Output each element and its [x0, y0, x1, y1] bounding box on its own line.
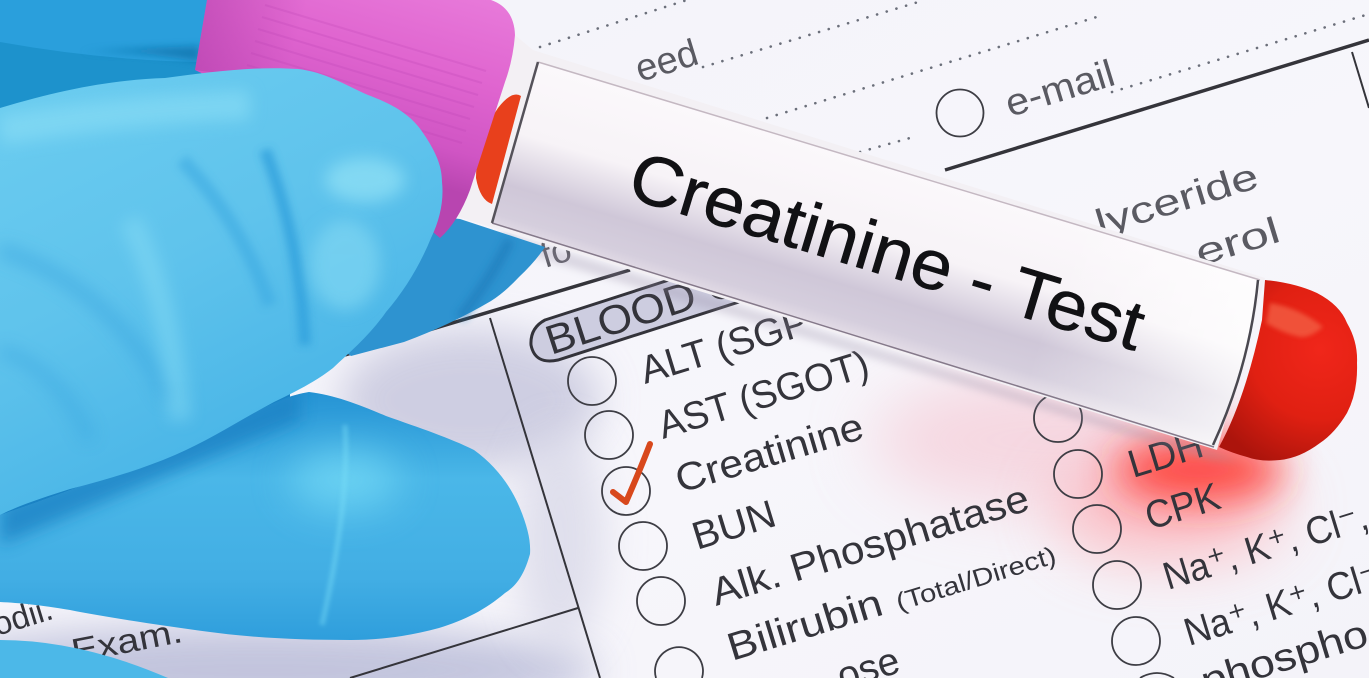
label text: Creatinine - Test: [621, 137, 1153, 365]
form labels: CPK: [1140, 475, 1225, 539]
tube label: [492, 62, 1260, 447]
form labels: Creatinine: [670, 405, 869, 502]
form labels: ALT (SGP: [635, 301, 814, 393]
form labels: Bilirubin: [722, 582, 888, 670]
cap ribs: [270, 6, 486, 102]
purple tube cap: [195, 0, 515, 238]
glove: bottom finger edge: [0, 640, 168, 678]
lower finger shading: [0, 385, 400, 625]
dotted lines: [540, 0, 1369, 152]
form labels: fo: [535, 228, 576, 276]
form rules: [345, 40, 1369, 678]
form labels: eed: [630, 32, 703, 91]
form labels: Exam.: [68, 612, 185, 671]
tube glass: [455, 35, 1265, 450]
label edges: [492, 62, 1260, 447]
form labels: LDH: [1123, 423, 1208, 487]
paper shadows near the glove: [0, 330, 605, 678]
icon: red check mark: [613, 444, 650, 502]
form labels: lyceride: [1090, 155, 1263, 244]
form labels: erol: [1190, 209, 1285, 274]
tube shadow on the paper: [500, 232, 1240, 462]
form labels: Alk. Phosphatase: [706, 477, 1034, 615]
blood visible at tube neck: [476, 94, 521, 204]
blood highlight: [1266, 303, 1323, 337]
finger wrinkles and shading: [0, 105, 405, 440]
form labels: e-mail: [1000, 53, 1120, 126]
blood heading pill: BLOOD C: [540, 258, 744, 364]
form labels: AST (SGOT): [653, 343, 874, 448]
label right sheen: [1000, 217, 1260, 447]
blood end of tube: [1219, 280, 1357, 461]
form labels: .: [41, 629, 61, 667]
red glow on the paper: [870, 370, 1285, 560]
check circles: [568, 90, 1174, 678]
form labels: BUN: [687, 493, 781, 559]
glove: lower finger: [0, 370, 530, 640]
glove: upper finger: [0, 68, 443, 515]
blood test tube: [195, 0, 1357, 461]
form labels: (Total/Direct): [893, 541, 1060, 617]
glove: back fingers behind the cap: [0, 0, 545, 356]
